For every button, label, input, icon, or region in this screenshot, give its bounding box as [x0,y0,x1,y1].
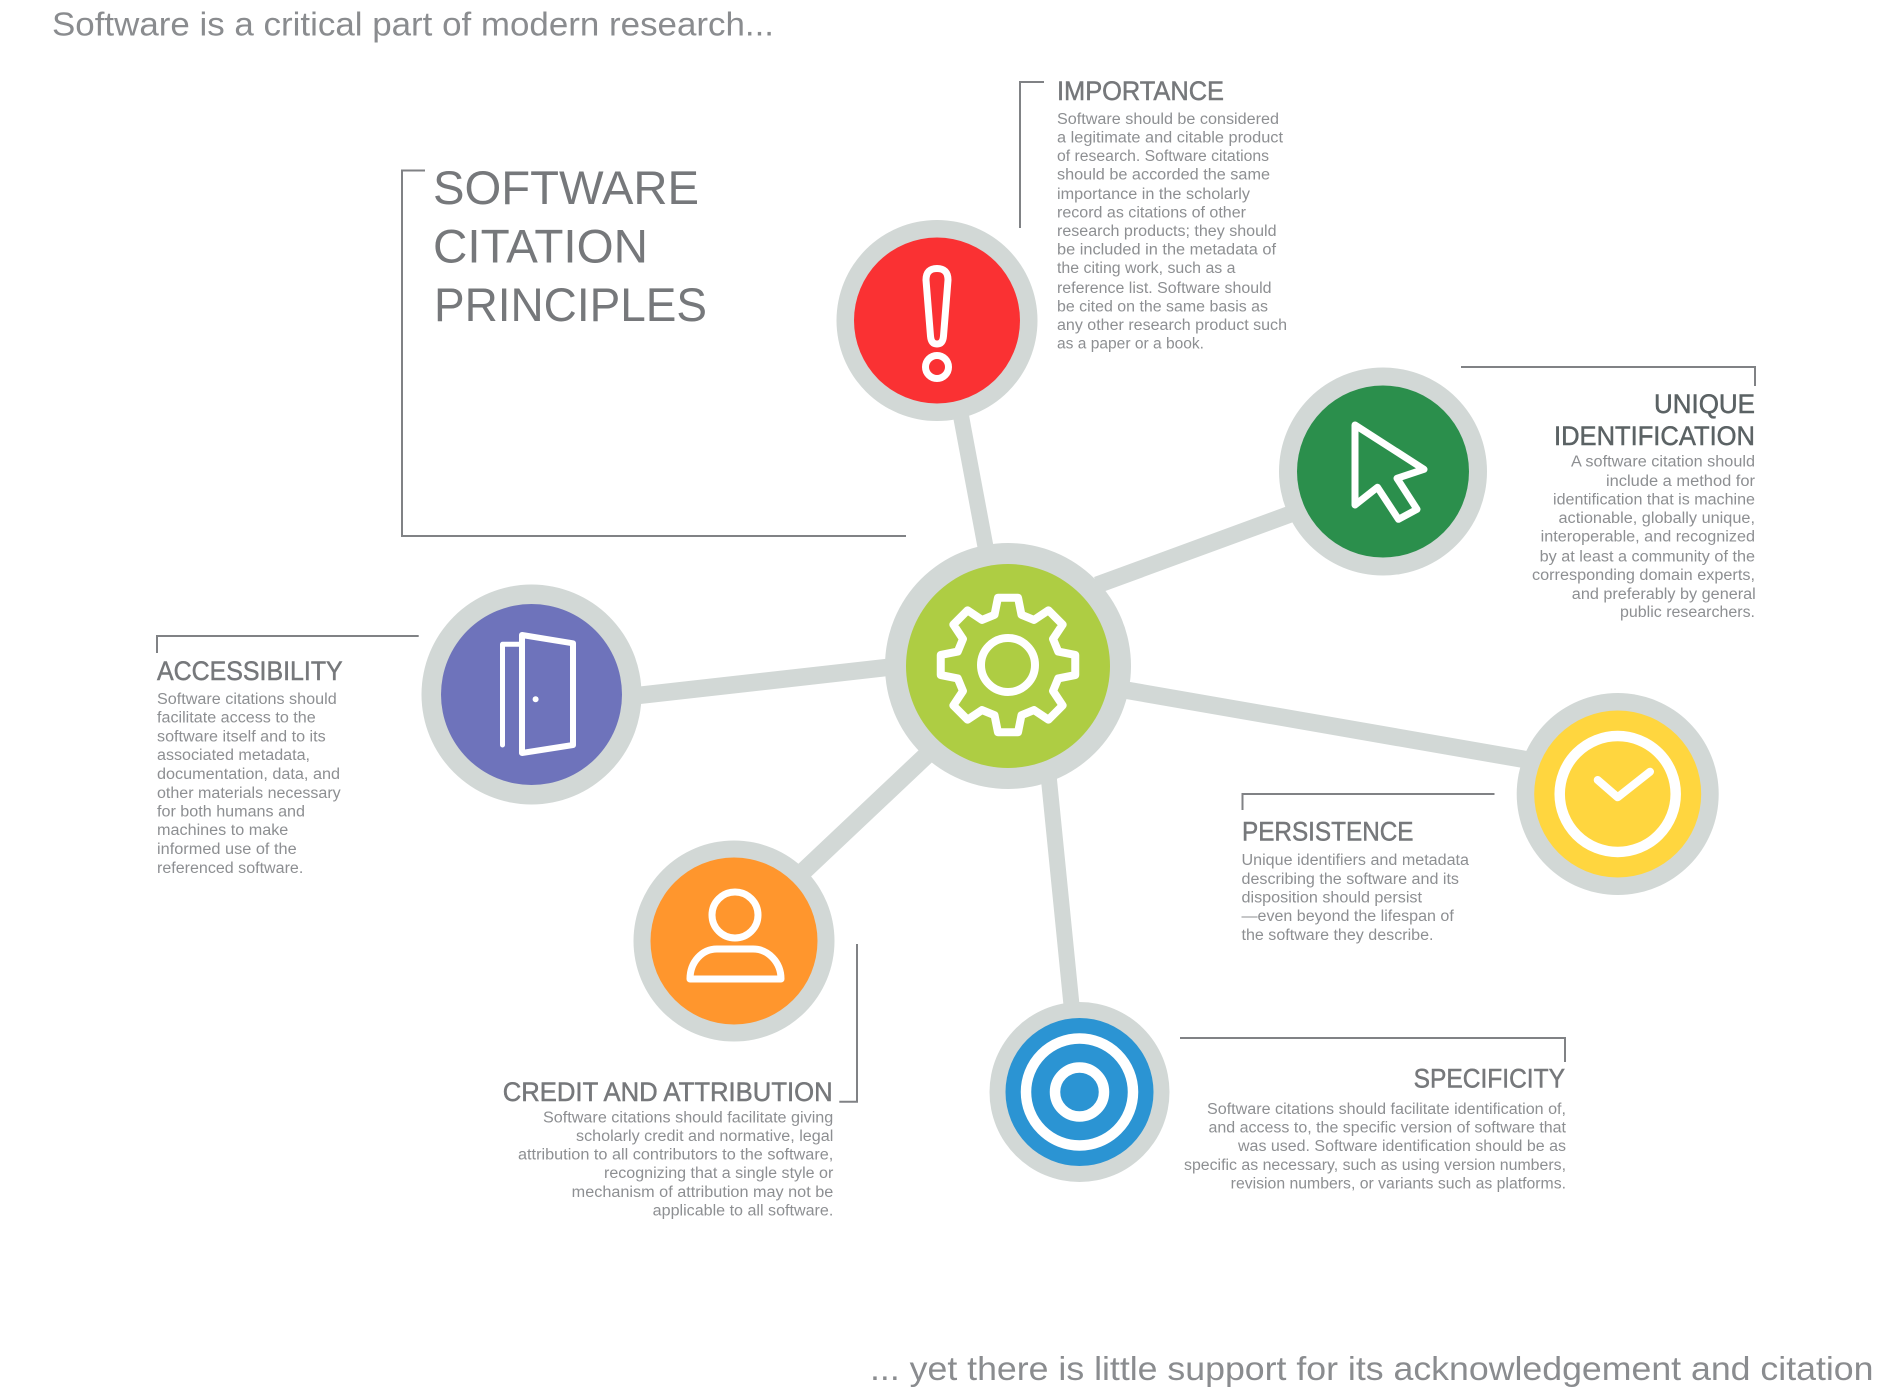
panel: specificity: revision numbers, or variants such as platforms. [1231,1176,1566,1193]
panel: importance: be cited on the same basis as [1057,299,1268,316]
connector network [620,400,1530,1030]
panel: importance: Software should be considered [1057,111,1279,128]
panel: persistence: describing the software and its [1242,871,1459,888]
panel: unique identification: IDENTIFICATION [1554,421,1755,451]
title with bracket [402,161,906,536]
panel: persistence: PERSISTENCE [1242,817,1414,847]
panel: unique identification: interoperable, and recognized [1541,529,1755,546]
panel: specificity: was used. Software identification should be as [1237,1138,1566,1155]
panel: credit and attribution: Software citations should facilitate giving [543,1109,833,1126]
panel: accessibility: for both humans and [157,804,305,821]
panel: unique identification: and preferably by general [1572,586,1756,603]
panel: importance: the citing work, such as a [1057,260,1236,277]
panel: accessibility: other materials necessary [157,785,341,802]
panel: accessibility: facilitate access to the [157,710,316,727]
panel: importance: any other research product such [1057,317,1287,334]
title with bracket: SOFTWARE [433,161,699,214]
panel: unique identification: by at least a community of the [1540,549,1755,566]
panel: specificity: SPECIFICITY [1414,1064,1565,1094]
panel: credit and attribution: CREDIT AND ATTRIBUTION [503,1077,833,1107]
panel: importance: should be accorded the same [1057,167,1270,184]
panel: accessibility: documentation, data, and [157,766,340,783]
panel: unique identification: public researchers. [1620,604,1755,621]
panel: persistence: disposition should persist [1242,890,1423,907]
panel: importance: be included in the metadata of [1057,242,1277,259]
panel: credit and attribution: applicable to all software. [653,1202,833,1220]
panel: persistence: —even beyond the lifespan of [1242,908,1455,925]
panel: unique identification: A software citation should [1571,454,1755,471]
panel: credit and attribution: recognizing that a single style or [604,1165,833,1182]
panel: importance [1020,76,1287,353]
node: unique identification [1279,368,1487,576]
panel: accessibility: ACCESSIBILITY [157,656,343,686]
panel: unique identification: actionable, globally unique, [1558,510,1755,527]
hub: gear [885,543,1131,789]
panel: credit and attribution: mechanism of attribution may not be [572,1184,833,1201]
panel: specificity: and access to, the specific version of software that [1208,1120,1567,1137]
panel: persistence [1242,794,1494,944]
panel: unique identification: identification that is machine [1553,492,1755,509]
panel: credit and attribution [503,944,857,1220]
panel: specificity: Software citations should facilitate identification of, [1207,1101,1566,1118]
panel: unique identification: corresponding domain experts, [1532,567,1755,584]
panel: specificity [1180,1038,1567,1193]
panel: credit and attribution: attribution to all contributors to the software, [518,1146,833,1164]
node: persistence [1517,693,1719,895]
panel: importance: importance in the scholarly [1057,186,1250,203]
panel: accessibility: referenced software. [157,860,303,877]
icon: exclamation mark [926,268,948,378]
panel: importance: of research. Software citations [1057,148,1269,165]
title with bracket: CITATION [433,220,648,272]
icon: person [690,892,781,979]
panel: importance: record as citations of other [1057,205,1246,222]
panel: importance: as a paper or a book. [1057,336,1204,353]
icon: door [502,635,573,753]
panel: importance: research products; they should [1057,223,1276,240]
panel: persistence: Unique identifiers and metadata [1242,852,1469,869]
panel: unique identification [1461,367,1756,621]
panel: accessibility: machines to make [157,822,288,839]
panel: accessibility [157,636,419,877]
node: importance [836,220,1038,421]
panel: persistence: the software they describe. [1242,927,1434,944]
node: credit and attribution [634,840,834,1042]
panel: credit and attribution: scholarly credit and normative, legal [576,1128,833,1145]
panel: importance: IMPORTANCE [1057,76,1224,106]
closing text: ... yet there is little support for its acknowledgement and citation [870,1350,1874,1387]
panel: accessibility: informed use of the [157,841,297,858]
icon: clock [1560,736,1676,852]
panel: importance: reference list. Software should [1057,280,1272,297]
icon: gear [941,598,1075,732]
panel: accessibility: Software citations should [157,691,337,708]
panel: unique identification: include a method for [1606,473,1755,490]
title with bracket: PRINCIPLES [434,278,707,331]
node: specificity [990,1002,1170,1182]
node: accessibility [422,584,642,804]
icon: cursor arrow [1355,425,1424,519]
panel: unique identification: UNIQUE [1654,389,1755,419]
panel: accessibility: associated metadata, [157,747,310,764]
icon: target [1026,1038,1133,1146]
panel: importance: a legitimate and citable product [1057,130,1284,147]
intro text: Software is a critical part of modern research... [52,6,774,42]
panel: accessibility: software itself and to its [157,729,326,746]
panel: specificity: specific as necessary, such as using version numbers, [1184,1157,1566,1174]
